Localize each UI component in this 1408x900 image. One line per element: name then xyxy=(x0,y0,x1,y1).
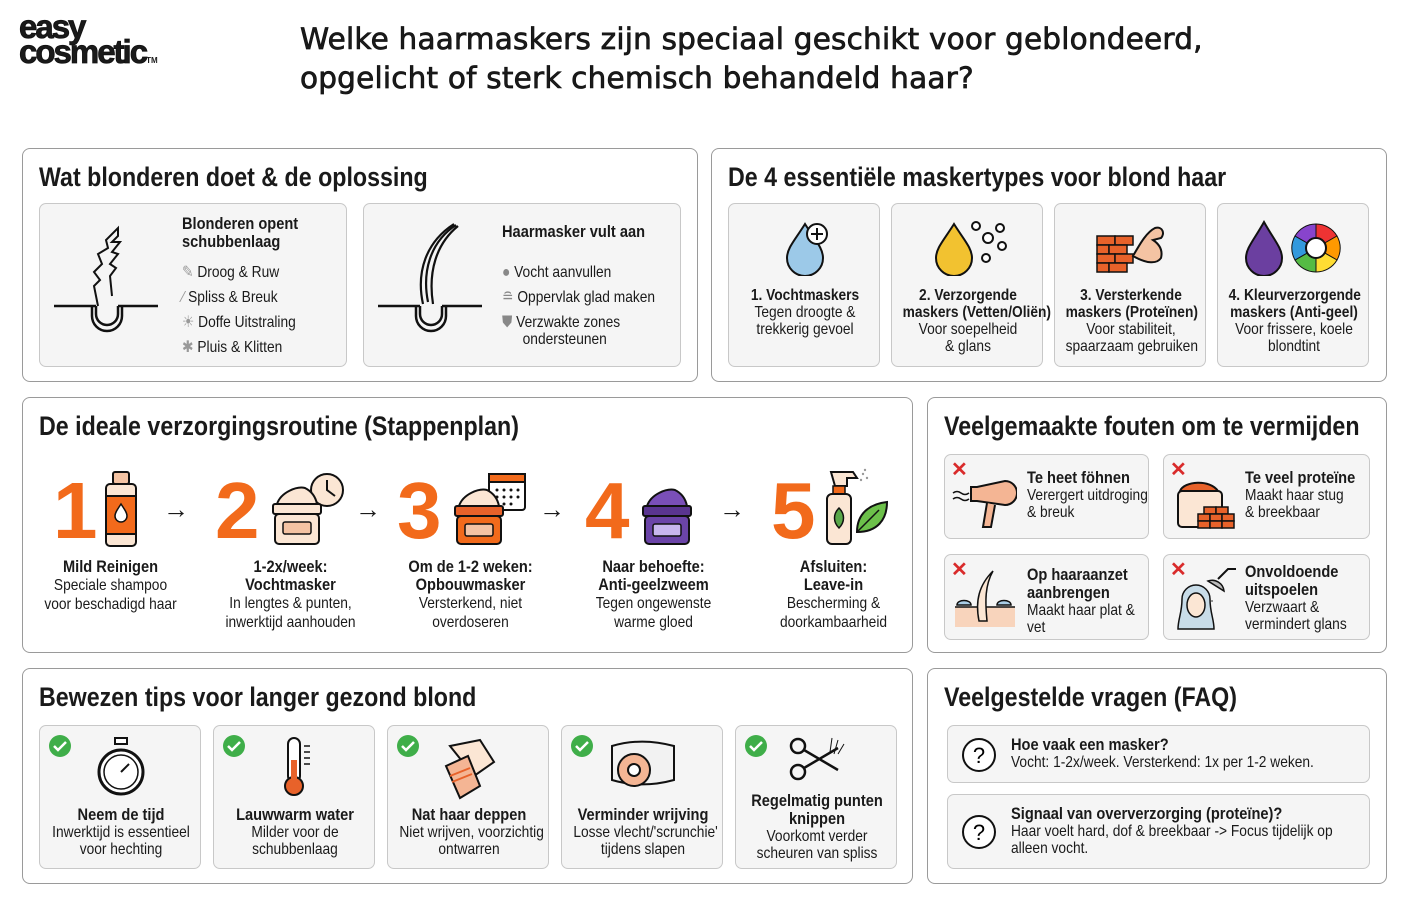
heading: De 4 essentiële maskertypes voor blond haar xyxy=(728,162,1226,192)
panel: veelgemaakte fouten xyxy=(927,397,1387,653)
tip 5 xyxy=(735,725,897,869)
tip 5: Regelmatig punten xyxy=(751,791,883,810)
text: schubbenlaag xyxy=(182,232,280,251)
card: haaraanzet: vet xyxy=(1027,619,1045,636)
card: haaraanzet: aanbrengen xyxy=(1027,583,1110,602)
step labels: warme gloed xyxy=(614,614,693,631)
card: fohnen xyxy=(944,454,1149,539)
step labels: voor beschadigd haar xyxy=(44,596,177,613)
step 4 xyxy=(585,466,692,555)
card 2: maskers (Vetten/Oliën) xyxy=(903,304,1051,321)
heading: Veelgestelde vragen (FAQ) xyxy=(944,682,1237,712)
tip 5: Voorkomt verder xyxy=(767,828,867,845)
faq 1: Hoe vaak een masker? xyxy=(1011,735,1169,754)
faq 1 xyxy=(947,725,1370,783)
text: Blonderen opent xyxy=(182,214,298,233)
tip 4: tijdens slapen xyxy=(601,841,685,858)
icon: healthy hair xyxy=(378,223,482,332)
card: uitspoelen: Onvoldoende xyxy=(1245,562,1338,581)
tip 3: Nat haar deppen xyxy=(412,805,526,824)
card 2 xyxy=(891,203,1043,367)
card 4: blondtint xyxy=(1268,338,1320,355)
tip 3 xyxy=(387,725,549,869)
card: te veel proteine xyxy=(1163,454,1370,539)
card 3: spaarzaam gebruiken xyxy=(1066,338,1198,355)
card: haarmasker vult aan xyxy=(363,203,681,367)
card: blonderen opent xyxy=(39,203,347,367)
tip 1: Neem de tijd xyxy=(78,805,164,824)
arrow: → xyxy=(163,494,189,524)
card 3: maskers (Proteïnen) xyxy=(1066,304,1198,321)
step labels: Vochtmasker xyxy=(245,575,336,594)
step 4: 4 xyxy=(585,466,630,555)
arrow: → xyxy=(719,494,745,524)
faq 2: Haar voelt hard, dof & breekbaar -> Focus tijdelijk op xyxy=(1011,823,1333,840)
heading: Veelgemaakte fouten om te vermijden xyxy=(944,411,1360,441)
card: te veel proteine: ✕ xyxy=(1170,459,1187,481)
step labels: Tegen ongewenste xyxy=(596,595,711,612)
title: Welke haarmaskers zijn speciaal geschikt voor geblondeerd, xyxy=(300,22,1203,56)
step labels: Speciale shampoo xyxy=(54,577,167,594)
tip 4: Losse vlecht/'scrunchie' xyxy=(573,824,718,841)
tip 2 xyxy=(213,725,375,869)
card: blonderen opent: ☀ Doffe Uitstraling xyxy=(182,314,296,331)
step labels: doorkambaarheid xyxy=(780,614,887,631)
faq 1: Vocht: 1-2x/week. Versterkend: 1x per 1-2 weken. xyxy=(1011,754,1314,771)
step 2: 2 xyxy=(215,466,260,555)
tip 5: knippen xyxy=(789,809,845,828)
step labels: In lengtes & punten, xyxy=(229,595,352,612)
tip 1: Inwerktijd is essentieel xyxy=(52,824,190,841)
card: uitspoelen: Verzwaart & xyxy=(1245,599,1319,616)
panel: 4 maskertypes xyxy=(711,148,1387,382)
icon: damaged hair xyxy=(54,226,158,332)
card: haarmasker vult aan: ondersteunen xyxy=(523,331,607,348)
step labels: overdoseren xyxy=(432,614,509,631)
card: haarmasker vult aan: ● Vocht aanvullen xyxy=(502,264,611,281)
title: opgelicht of sterk chemisch behandeld haar? xyxy=(300,61,974,95)
card: haaraanzet xyxy=(944,554,1149,640)
panel: FAQ xyxy=(927,668,1387,884)
card 4: maskers (Anti-geel) xyxy=(1230,304,1358,321)
card 1: 1. Vochtmaskers xyxy=(751,287,859,304)
card 4: Voor frissere, koele xyxy=(1235,321,1353,338)
tip 4 xyxy=(561,725,723,869)
card: haarmasker vult aan: ⛊ Verzwakte zones xyxy=(502,314,620,331)
logo: cosmeticTM xyxy=(19,33,158,70)
card: uitspoelen xyxy=(1163,554,1370,640)
arrow: → xyxy=(355,494,381,524)
card: te veel proteine: & breekbaar xyxy=(1245,504,1320,521)
tip 1 xyxy=(39,725,201,869)
card 1: trekkerig gevoel xyxy=(756,321,854,338)
card: haaraanzet: Maakt haar plat & xyxy=(1027,602,1135,619)
tip 3: ontwarren xyxy=(438,841,500,858)
panel: wat blonderen doet xyxy=(22,148,698,382)
card 2: & glans xyxy=(945,338,991,355)
card: fohnen: ✕ xyxy=(951,459,968,481)
step 2 xyxy=(215,466,344,555)
card 2: Voor soepelheid xyxy=(919,321,1017,338)
heading: Bewezen tips voor langer gezond blond xyxy=(39,682,476,712)
card: uitspoelen: vermindert glans xyxy=(1245,616,1347,633)
heading: Wat blonderen doet & de oplossing xyxy=(39,162,428,192)
card 3 xyxy=(1054,203,1206,367)
arrow: → xyxy=(539,494,565,524)
card: blonderen opent: ⁄ Spliss & Breuk xyxy=(182,289,278,306)
step labels: Leave-in xyxy=(804,575,863,594)
card: blonderen opent: ✎ Droog & Ruw xyxy=(182,264,279,281)
tip 1: voor hechting xyxy=(80,841,162,858)
card 1: Tegen droogte & xyxy=(755,304,855,321)
step labels xyxy=(44,557,887,631)
faq 2: ? xyxy=(973,820,985,845)
panel: verzorgingsroutine xyxy=(22,397,913,653)
card 3: Voor stabiliteit, xyxy=(1086,321,1176,338)
faq 2: alleen vocht. xyxy=(1011,840,1088,857)
logo: easy xyxy=(19,8,84,45)
step 3 xyxy=(397,466,526,555)
card: te veel proteine: Maakt haar stug xyxy=(1245,487,1344,504)
step 1: 1 xyxy=(53,466,98,555)
step labels: Mild Reinigen xyxy=(63,557,158,576)
card: haaraanzet: ✕ xyxy=(951,559,968,581)
title xyxy=(300,22,1203,95)
step labels: 1-2x/week: xyxy=(254,557,327,576)
text: Haarmasker vult aan xyxy=(502,222,645,241)
text xyxy=(182,214,298,251)
faq 1: ? xyxy=(973,743,985,768)
tip 4: Verminder wrijving xyxy=(578,805,708,824)
step labels: Bescherming & xyxy=(787,595,880,612)
card 4 xyxy=(1217,203,1369,367)
tip 5: scheuren van spliss xyxy=(757,845,877,862)
step labels: Om de 1-2 weken: xyxy=(408,557,533,576)
step labels: Naar behoefte: xyxy=(602,557,705,576)
card: haaraanzet: Op haaraanzet xyxy=(1027,565,1128,584)
card: uitspoelen: uitspoelen xyxy=(1245,580,1318,599)
step labels: Anti-geelzweem xyxy=(598,575,709,594)
card: fohnen: Verergert uitdroging xyxy=(1027,487,1148,504)
card: fohnen: & breuk xyxy=(1027,504,1074,521)
step 5: 5 xyxy=(771,466,816,555)
tip 3: Niet wrijven, voorzichtig xyxy=(399,824,544,841)
heading: De ideale verzorgingsroutine (Stappenplan) xyxy=(39,411,519,441)
step labels: Opbouwmasker xyxy=(416,575,525,594)
faq 2: Signaal van oververzorging (proteïne)? xyxy=(1011,804,1282,823)
card: uitspoelen: ✕ xyxy=(1170,559,1187,581)
faq 2 xyxy=(947,794,1370,869)
step 3: 3 xyxy=(397,466,442,555)
logo xyxy=(19,8,158,70)
card: te veel proteine: Te veel proteïne xyxy=(1245,468,1355,487)
card: fohnen: Te heet föhnen xyxy=(1027,468,1130,487)
card 4: 4. Kleurverzorgende xyxy=(1229,287,1361,304)
card 1 xyxy=(728,203,880,367)
card: blonderen opent: ✱ Pluis & Klitten xyxy=(182,339,282,356)
panel: bewezen tips xyxy=(22,668,913,884)
step 5 xyxy=(771,466,888,555)
card 3: 3. Versterkende xyxy=(1080,287,1182,304)
tip 2: Milder voor de xyxy=(251,824,339,841)
step 1 xyxy=(53,466,137,555)
card: haarmasker vult aan: ≘ Oppervlak glad maken xyxy=(502,289,655,306)
tip 2: schubbenlaag xyxy=(252,841,338,858)
card 2: 2. Verzorgende xyxy=(919,287,1017,304)
step labels: inwerktijd aanhouden xyxy=(225,614,356,631)
step labels: Afsluiten: xyxy=(800,557,867,576)
tip 2: Lauwwarm water xyxy=(236,805,354,824)
step labels: Versterkend, niet xyxy=(419,595,522,612)
